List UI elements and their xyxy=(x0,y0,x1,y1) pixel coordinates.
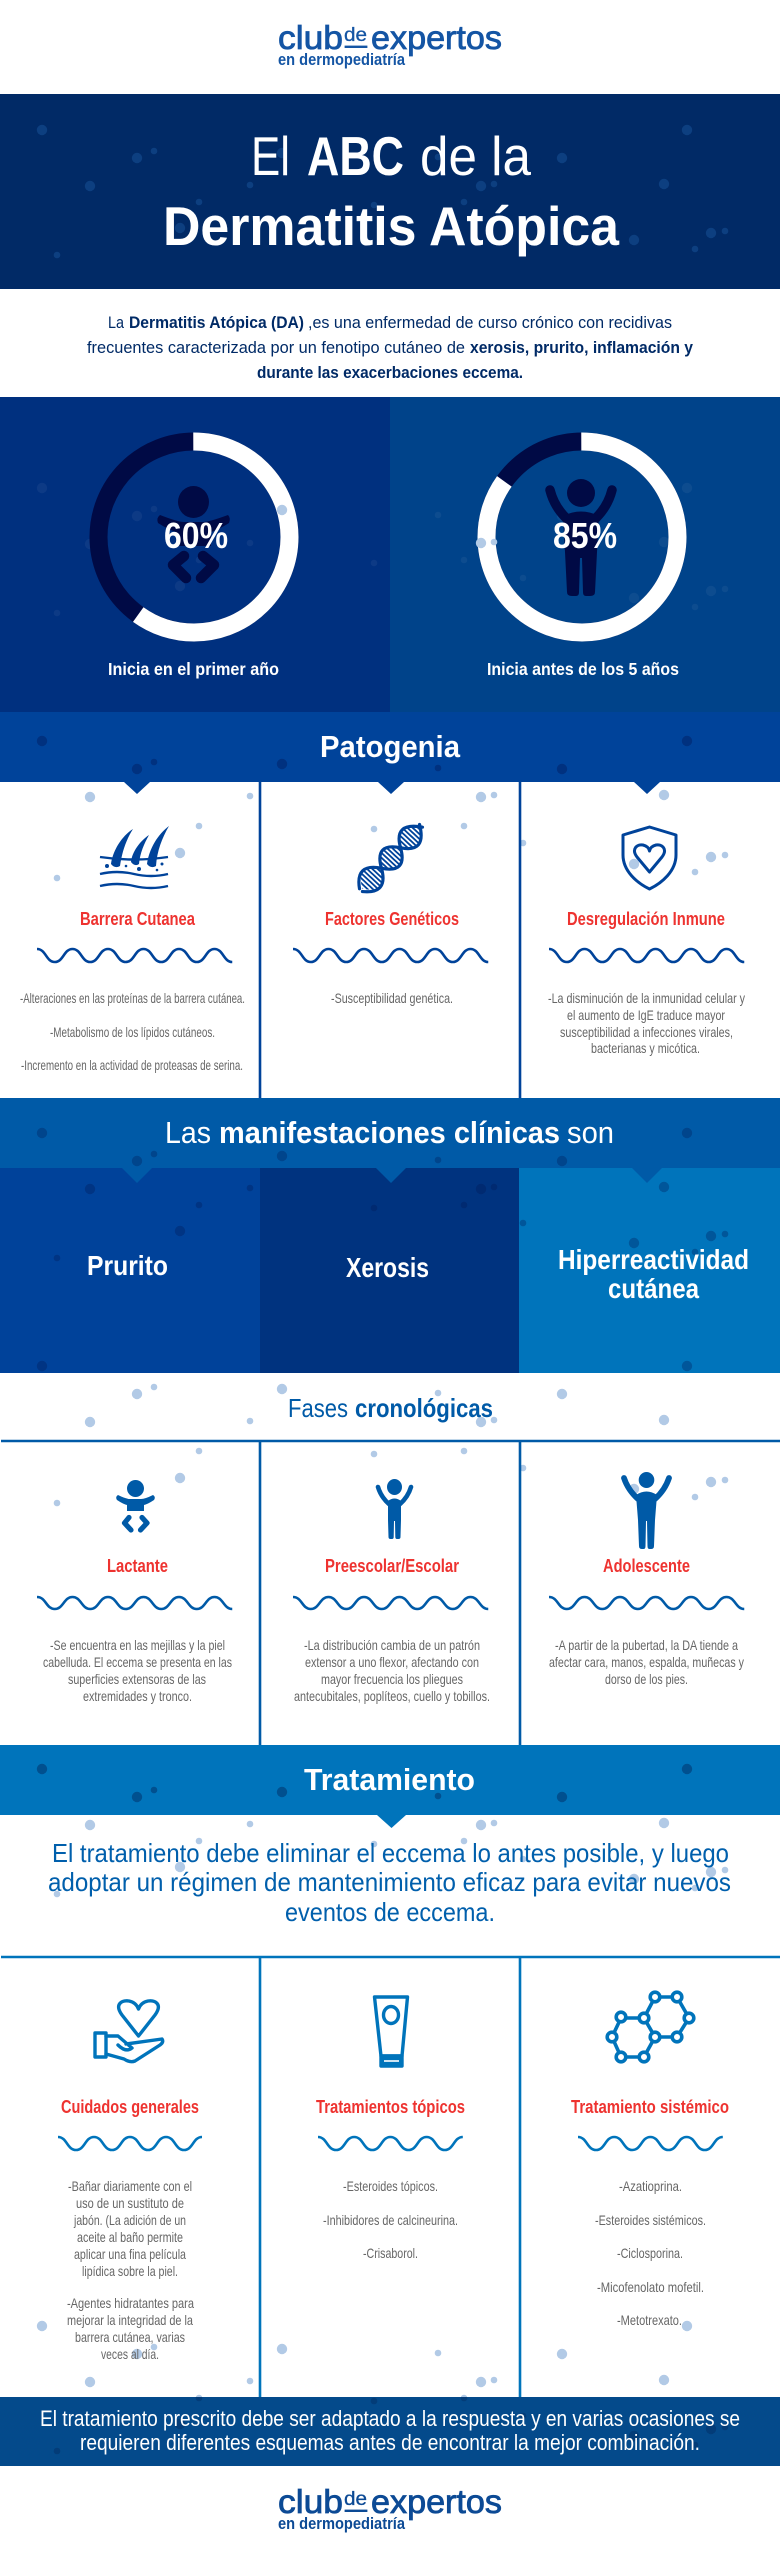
wave divider xyxy=(293,1597,488,1609)
body text: -La distribución cambia de un patrón xyxy=(304,1637,480,1653)
card: Cuidados generales xyxy=(58,2001,202,2362)
logo: club de expertos (bottom): en dermopediatría xyxy=(278,2515,406,2533)
card: Lactante xyxy=(37,1480,232,1704)
logo: club de expertos (top): expertos xyxy=(371,19,502,56)
ring chart: 85%: 85% xyxy=(553,515,617,556)
body text: -Esteroides tópicos. xyxy=(343,2178,438,2194)
wave divider xyxy=(37,1597,232,1609)
body text: -Ciclosporina. xyxy=(617,2245,683,2261)
icon: skin and hair xyxy=(100,826,169,888)
treatment statement xyxy=(48,1838,731,1927)
logo: club de expertos (top): club xyxy=(278,19,343,56)
heading: Adolescente xyxy=(603,1555,690,1576)
wave divider xyxy=(549,1597,744,1609)
body text: lipídica sobre la piel. xyxy=(82,2263,178,2279)
body text: -Bañar diariamente con el xyxy=(68,2178,192,2194)
body text: -Se encuentra en las mejillas y la piel xyxy=(50,1637,225,1653)
logo: club de expertos (bottom): de xyxy=(344,2489,367,2510)
body text: bacterianas y micótica. xyxy=(591,1040,700,1056)
card: Desregulación Inmune xyxy=(548,827,745,1056)
heading: Preescolar/Escolar xyxy=(325,1555,459,1576)
ring chart: 60%: 60% xyxy=(164,515,228,556)
heading: Fases cronológicas: Fases xyxy=(288,1393,348,1423)
wave divider xyxy=(58,2137,202,2150)
intro paragraph: La xyxy=(108,314,125,332)
panel: manifestaciones clínicas xyxy=(0,1098,780,1373)
title banner xyxy=(0,94,780,289)
card: Tratamientos tópicos xyxy=(316,1997,465,2261)
logo: club de expertos (bottom): expertos xyxy=(371,2483,502,2520)
body text: cabelluda. El eccema se presenta en las xyxy=(43,1654,232,1670)
icon: baby xyxy=(116,1480,155,1530)
title text: Dermatitis Atópica xyxy=(163,195,619,257)
label: Hiperreactividad cutánea xyxy=(558,1244,749,1304)
closing note banner: requieren diferentes esquemas antes de encontrar la mejor combinación. xyxy=(80,2430,700,2455)
closing note banner xyxy=(0,2397,780,2466)
body text: -Incremento en la actividad de proteasas de serina. xyxy=(21,1057,243,1073)
banner: Tratamiento: Tratamiento xyxy=(304,1762,475,1797)
body text: el aumento de IgE traduce mayor xyxy=(567,1007,725,1023)
banner: Patogenia: Patogenia xyxy=(320,729,461,764)
heading: Barrera Cutanea xyxy=(80,908,196,929)
treatment statement: adoptar un régimen de mantenimiento eficaz para evitar nuevos xyxy=(48,1867,731,1897)
title text: ABC xyxy=(307,125,404,187)
body text: aplicar una fina película xyxy=(74,2246,186,2262)
body text: -Metotrexato. xyxy=(617,2312,682,2328)
wave divider xyxy=(578,2137,723,2150)
label: Prurito: Prurito xyxy=(87,1250,168,1281)
logo: club de expertos (bottom): club xyxy=(278,2483,343,2520)
wave divider xyxy=(318,2137,463,2150)
heading: Fases cronológicas xyxy=(288,1393,493,1423)
icon: child xyxy=(378,1479,411,1539)
body text: extensor a uno flexor, afectando con xyxy=(305,1654,479,1670)
logo: club de expertos (top) xyxy=(278,19,502,69)
ring chart: 60% xyxy=(98,442,290,632)
body text: susceptibilidad a infecciones virales, xyxy=(560,1024,733,1040)
heading: Desregulación Inmune xyxy=(567,908,725,929)
body text: jabón. (La adición de un xyxy=(73,2212,186,2228)
wave divider xyxy=(549,949,744,962)
label: Hiperreactividad cutánea: cutánea xyxy=(608,1273,699,1304)
heading: Las xyxy=(165,1115,211,1150)
body text xyxy=(67,2178,194,2362)
body text xyxy=(43,1637,232,1704)
icon: molecule xyxy=(607,1992,694,2062)
body text xyxy=(323,2178,458,2261)
body text: -Crisaborol. xyxy=(363,2245,418,2261)
body text xyxy=(20,990,245,1073)
intro paragraph: Dermatitis Atópica (DA) xyxy=(129,314,304,332)
banner: Patogenia xyxy=(0,712,780,794)
title text: El xyxy=(251,125,290,187)
body text: aceite al baño permite xyxy=(77,2229,183,2245)
stat label left: Inicia en el primer año xyxy=(108,659,279,679)
body text: -Azatioprina. xyxy=(619,2178,682,2194)
heading: Lactante xyxy=(107,1555,168,1576)
treatment statement: El tratamiento debe eliminar el eccema lo antes posible, y luego xyxy=(52,1838,729,1868)
intro paragraph xyxy=(87,314,694,382)
icon: cream tube xyxy=(374,1997,408,2066)
body text xyxy=(549,1637,744,1687)
ring chart: 85% xyxy=(476,442,678,632)
logo: club de expertos (top): en dermopediatría xyxy=(278,51,406,69)
banner: Tratamiento xyxy=(0,1745,780,1828)
icon: shield with heart xyxy=(623,827,676,889)
icon: child xyxy=(550,479,612,596)
body text: -Metabolismo de los lípidos cutáneos. xyxy=(50,1024,215,1040)
body text xyxy=(548,990,745,1056)
title text: de la xyxy=(420,125,531,187)
body text: -Micofenolato mofetil. xyxy=(597,2279,704,2295)
heading: manifestaciones clínicas xyxy=(219,1115,560,1150)
body text: -Susceptibilidad genética. xyxy=(331,990,453,1006)
body text: -Inhibidores de calcineurina. xyxy=(323,2212,458,2228)
intro paragraph: xerosis, prurito, inflamación y xyxy=(470,339,694,357)
card: Barrera Cutanea xyxy=(20,826,245,1073)
intro paragraph: ,es una enfermedad de curso crónico con recidivas xyxy=(308,314,672,332)
body text: extremidades y tronco. xyxy=(83,1688,192,1704)
intro paragraph: durante las exacerbaciones eccema. xyxy=(257,364,523,382)
wave divider xyxy=(37,949,232,962)
logo: club de expertos (top): de xyxy=(344,25,367,46)
body text: veces al día. xyxy=(101,2346,159,2362)
card: Tratamiento sistémico xyxy=(571,1992,729,2328)
body text xyxy=(294,1637,490,1704)
icon: teenager xyxy=(624,1472,669,1549)
icon: DNA xyxy=(352,818,430,898)
body text: -Esteroides sistémicos. xyxy=(595,2212,706,2228)
body text: mejorar la integridad de la xyxy=(67,2312,193,2328)
stat label right: Inicia antes de los 5 años xyxy=(487,659,679,679)
body text: dorso de los pies. xyxy=(605,1671,688,1687)
icon: hand with heart xyxy=(95,2001,163,2062)
label: Hiperreactividad cutánea: Hiperreactividad xyxy=(558,1244,749,1275)
card: Factores Genéticos xyxy=(293,818,488,1006)
label: Xerosis: Xerosis xyxy=(346,1252,429,1283)
heading: Tratamiento sistémico xyxy=(571,2096,729,2117)
body text: superficies extensoras de las xyxy=(68,1671,206,1687)
card: Preescolar/Escolar xyxy=(293,1479,490,1704)
body text: -Agentes hidratantes para xyxy=(67,2295,194,2311)
heading: Cuidados generales xyxy=(61,2096,199,2117)
wave divider xyxy=(293,949,488,962)
body text: uso de un sustituto de xyxy=(76,2195,184,2211)
body text: antecubitales, poplíteos, cuello y tobillos. xyxy=(294,1688,490,1704)
intro paragraph: frecuentes caracterizada por un fenotipo cutáneo de xyxy=(87,339,465,357)
heading: Tratamientos tópicos xyxy=(316,2096,465,2117)
icon: baby xyxy=(157,486,230,578)
title text xyxy=(163,125,619,257)
panel: statistics xyxy=(0,397,780,712)
body text: mayor frecuencia los pliegues xyxy=(321,1671,463,1687)
body text: -Alteraciones en las proteínas de la barrera cutánea. xyxy=(20,990,245,1006)
heading: Factores Genéticos xyxy=(325,908,459,929)
card: Adolescente xyxy=(549,1472,744,1687)
logo: club de expertos (bottom) xyxy=(278,2483,502,2533)
heading: Fases cronológicas: cronológicas xyxy=(355,1393,493,1423)
body text xyxy=(595,2178,706,2328)
body text: barrera cutánea, varias xyxy=(75,2329,185,2345)
heading: son xyxy=(567,1115,614,1150)
treatment statement: eventos de eccema. xyxy=(285,1897,495,1927)
